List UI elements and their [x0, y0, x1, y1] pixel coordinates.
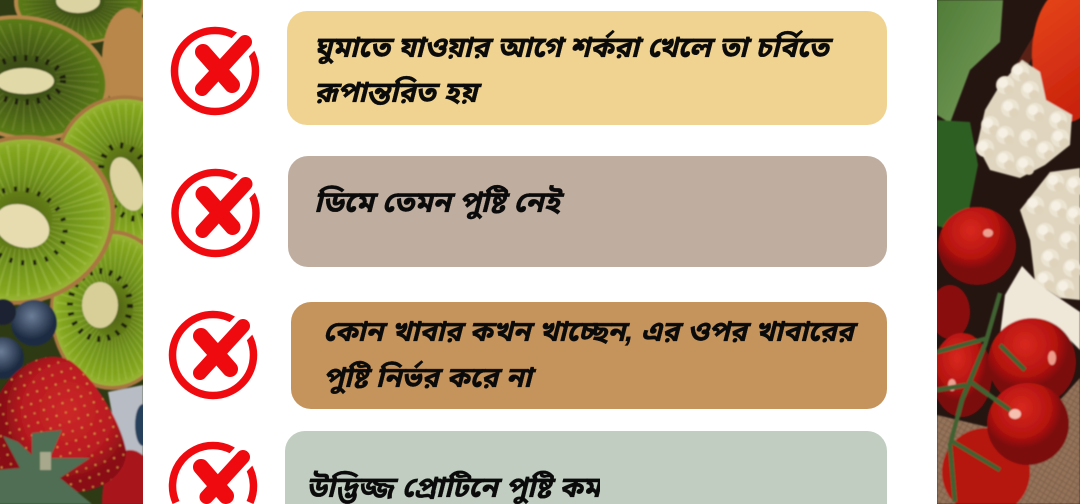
card 3	[291, 302, 887, 409]
tomato top	[1032, 0, 1080, 122]
tomatoes	[930, 207, 1076, 504]
cauliflower 1	[976, 60, 1072, 178]
table and small berry	[108, 385, 143, 455]
card 1 text: ঘুমাতে যাওয়ার আগে শর্করা খেলে তা চর্বিতে	[314, 32, 829, 64]
photo: kiwi, blueberries and strawberries	[0, 0, 143, 504]
card 3 text: পুষ্টি নির্ভর করে না	[323, 362, 532, 394]
icon 3	[172, 314, 254, 396]
cauliflower 2	[1020, 168, 1080, 300]
kiwi slice lower	[50, 230, 174, 390]
vine	[937, 293, 1025, 502]
card 3 text	[323, 316, 858, 394]
stem behind	[1010, 25, 1050, 85]
card 1	[287, 11, 887, 125]
kiwi slice top	[14, 0, 146, 44]
kiwi slice big	[0, 114, 134, 326]
icon 4	[172, 446, 254, 502]
strawberry leaves	[0, 430, 92, 504]
kiwi slice dark	[0, 2, 120, 154]
lettuce top	[937, 0, 1003, 123]
kiwi skin	[102, 8, 154, 112]
lettuce lower	[937, 120, 978, 228]
card 2 text: ডিমে তেমন পুষ্টি নেই	[314, 186, 560, 219]
strawberry	[0, 357, 126, 493]
background	[937, 0, 1080, 504]
blueberries	[11, 300, 57, 346]
card 1 text	[314, 30, 834, 109]
card 4 text: উদ্ভিজ্জ প্রোটিনে পুষ্টি কম	[306, 472, 600, 504]
burlap	[937, 378, 1080, 504]
card 1 text: রূপান্তরিত হয়	[314, 77, 477, 109]
second strawberry	[102, 450, 158, 504]
icons: red cross marks	[168, 26, 260, 504]
icon 1	[174, 30, 256, 112]
card 3 text: কোন খাবার কখন খাচ্ছেন, এর ওপর খাবারের	[323, 316, 853, 348]
background	[0, 0, 143, 504]
card 2	[288, 156, 887, 267]
icon 2	[175, 172, 256, 254]
photo: vegetables	[937, 0, 1080, 504]
kiwi slice right	[34, 75, 220, 265]
card 4	[285, 431, 887, 504]
cloth	[1000, 266, 1080, 350]
